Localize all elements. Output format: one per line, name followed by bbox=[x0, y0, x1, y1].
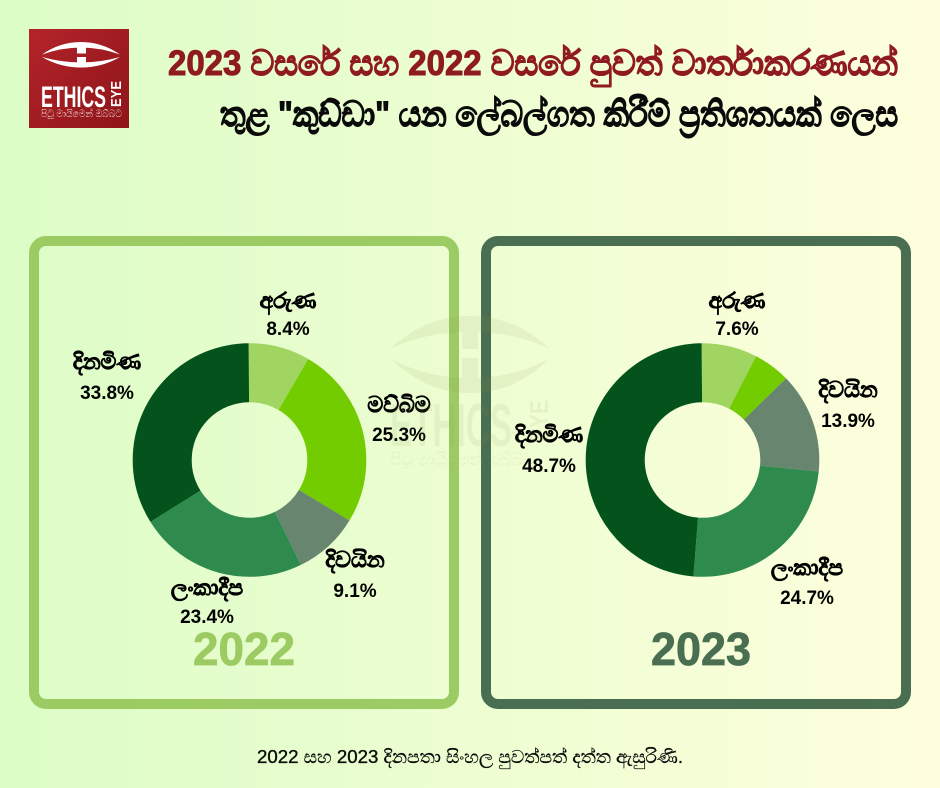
label: Lankadeepa 2023: ලංකාදීප bbox=[771, 555, 843, 582]
label: Mawbima 2022 bbox=[367, 392, 431, 446]
label: Divaina 2022 bbox=[325, 547, 385, 602]
label: Divaina 2023: දිවයින bbox=[818, 377, 878, 404]
label: Dinamina 2023: දිනමිණ bbox=[515, 422, 583, 449]
label: Aruna 2023 bbox=[709, 288, 766, 340]
donut chart 2022 bbox=[162, 373, 337, 547]
title line 1: 2023 වසරේ සහ 2022 වසරේ පුවත් වාර්තාකරණයන් bbox=[168, 44, 898, 87]
footer source note: 2022 සහ 2023 දිනපතා සිංහල පුවත්පත් දත්ත ඇසුරිණි. bbox=[257, 747, 683, 769]
label: Divaina 2023 bbox=[818, 377, 878, 432]
panel: 2023 bbox=[486, 241, 906, 704]
label: Lankadeepa 2023 bbox=[771, 555, 843, 609]
label: Aruna 2022: 8.4% bbox=[266, 319, 310, 340]
label: Divaina 2023: 13.9% bbox=[821, 411, 875, 432]
label: Lankadeepa 2022 bbox=[171, 575, 243, 628]
label: Dinamina 2022 bbox=[73, 349, 141, 404]
label: Aruna 2022: අරුණ bbox=[260, 288, 317, 315]
panel: 2022 bbox=[34, 241, 454, 704]
logo: Ethics Eye: ETHICS bbox=[41, 81, 106, 114]
year 2022: 2022 bbox=[193, 623, 295, 675]
watermark logo: EYE bbox=[524, 400, 554, 442]
logo: Ethics Eye: පිටු මායිමෙන් ඔබ්බට bbox=[41, 107, 122, 120]
label: Divaina 2022: දිවයින bbox=[325, 547, 385, 574]
label: Lankadeepa 2022: 23.4% bbox=[180, 607, 234, 628]
label: Dinamina 2023: 48.7% bbox=[522, 456, 576, 477]
label: Aruna 2023: 7.6% bbox=[715, 319, 759, 340]
year 2023: 2023 bbox=[651, 623, 751, 675]
label: Mawbima 2022: 25.3% bbox=[372, 425, 426, 446]
logo: Ethics Eye: EYE bbox=[108, 81, 125, 107]
label: Lankadeepa 2022: ලංකාදීප bbox=[171, 575, 243, 602]
label: Lankadeepa 2023: 24.7% bbox=[780, 588, 834, 609]
label: Mawbima 2022: මව්බිම bbox=[367, 392, 431, 417]
logo: Ethics Eye bbox=[29, 29, 129, 128]
label: Aruna 2022 bbox=[260, 288, 317, 340]
label: Dinamina 2022: 33.8% bbox=[80, 383, 134, 404]
label: Aruna 2023: අරුණ bbox=[709, 288, 766, 315]
donut chart 2023 bbox=[615, 373, 790, 547]
label: Dinamina 2023 bbox=[515, 422, 583, 477]
label: Dinamina 2022: දිනමිණ bbox=[73, 349, 141, 376]
watermark logo: ETHICS bbox=[390, 392, 512, 459]
watermark logo bbox=[390, 316, 554, 469]
watermark logo: පිටු මායිමෙන් ඔබ්බට bbox=[390, 450, 535, 469]
label: Divaina 2022: 9.1% bbox=[333, 581, 377, 602]
